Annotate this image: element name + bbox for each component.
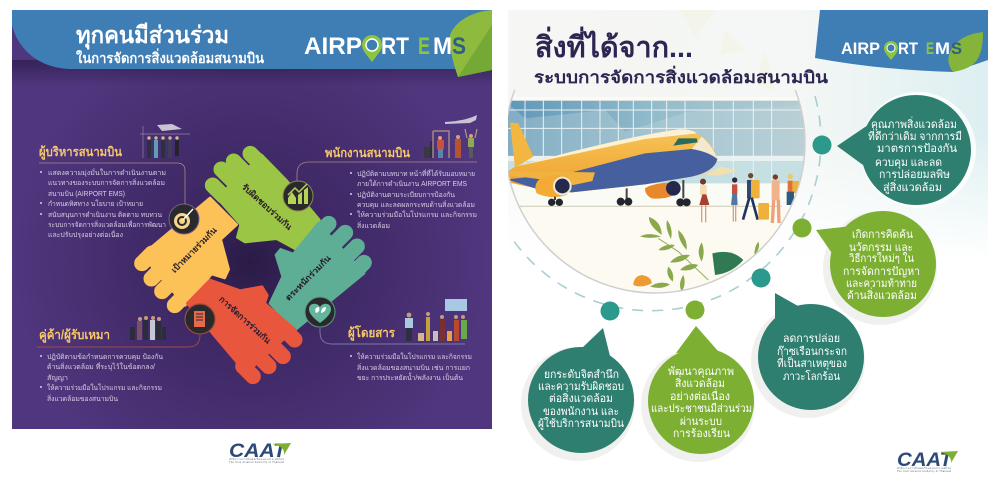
terminal glass xyxy=(505,101,805,292)
header banner xyxy=(815,10,988,72)
travellers xyxy=(699,173,799,223)
logo: airport ems: RT xyxy=(381,33,409,60)
background fade xyxy=(508,130,988,260)
title: ระบบการจัดการสิ่งแวดล้อมสนามบิน xyxy=(534,65,829,87)
body text: ปฏิบัติงานตามระเบียบการป้องกัน xyxy=(357,191,455,199)
title: สิ่งที่ได้จาก... xyxy=(535,26,693,64)
panel: benefits xyxy=(500,0,988,311)
body text xyxy=(40,168,166,239)
icon: passengers and board xyxy=(405,299,467,341)
body text: ปฏิบัติตามข้อกำหนดการควบคุม ป้องกัน xyxy=(47,353,163,361)
body text: สิ่งแวดล้อมของสนามบิน xyxy=(47,394,118,403)
timeline dot 2 xyxy=(792,218,812,238)
body text: สิ่งแวดล้อม xyxy=(357,221,390,230)
logo: airport ems: E xyxy=(418,33,430,60)
hand: goals xyxy=(142,198,237,305)
body text: ปฏิบัติตามบทบาท หน้าที่ที่ได้รับมอบหมาย xyxy=(357,169,475,178)
body text: สนับสนุนการดำเนินงาน ติดตาม ทบทวน xyxy=(48,211,162,219)
bubble: reduce greenhouse gases: ที่เป็นสาเหตุของ xyxy=(777,355,847,370)
banner shadow xyxy=(12,60,492,86)
logo: airport ems: M xyxy=(433,33,452,60)
heading: ผู้บริหารสนามบิน xyxy=(39,145,122,160)
bubble: better environmental quality xyxy=(837,92,976,208)
bubble: awareness: ยกระดับจิตสำนึก xyxy=(544,369,619,381)
bubble: continuous improvement: การร้องเรียน xyxy=(673,427,730,440)
heading: ผู้โดยสาร xyxy=(348,325,395,341)
timeline dot 5 xyxy=(600,302,620,320)
logo: airport ems: S xyxy=(951,39,962,58)
header banner xyxy=(12,10,492,69)
logo: CAAT right: The Civil Aviation Authority of Thailand xyxy=(897,470,952,473)
bubble: continuous improvement: อย่างต่อเนื่อง xyxy=(670,388,730,403)
panel background xyxy=(508,10,988,260)
bubble: continuous improvement xyxy=(641,326,755,462)
logo: CAAT left: สำนักงานการบินพลเรือนแห่งประเทศไทย xyxy=(229,457,284,461)
body text: สนามบิน (AIRPORT EMS) xyxy=(48,190,125,198)
body text: และปรับปรุงอย่างต่อเนื่อง xyxy=(48,230,123,239)
bubble: awareness xyxy=(521,328,635,461)
bubble: awareness: ต่อสิ่งแวดล้อม xyxy=(549,390,613,405)
logo: airport ems xyxy=(841,39,962,60)
logo: airport ems xyxy=(304,33,466,62)
logo: airport ems: AIRP xyxy=(304,33,362,60)
bubble: reduce greenhouse gases: ลดการปล่อย xyxy=(783,333,840,345)
label: responsibility: รับผิดชอบร่วมกัน xyxy=(240,182,294,232)
body text: ควบคุม และลดผลกระทบด้านสิ่งแวดล้อม xyxy=(357,200,475,209)
timeline dot 3 xyxy=(752,268,770,288)
logo: CAAT right: สำนักงานการบินพลเรือนแห่งประเทศไทย xyxy=(897,466,951,470)
bubble: innovation xyxy=(816,211,937,325)
logo: airport ems: RT xyxy=(898,39,919,58)
title xyxy=(534,26,829,87)
foliage xyxy=(633,217,759,292)
bubble: innovation: การจัดการปัญหา xyxy=(843,266,920,278)
icon: target xyxy=(169,204,199,234)
logo: airport ems: M xyxy=(935,39,950,58)
section: suppliers and contractors xyxy=(37,316,200,403)
photo: airplane at terminal xyxy=(508,90,806,294)
pale background shapes xyxy=(680,10,775,90)
section: airport management xyxy=(39,124,190,239)
body text xyxy=(350,352,472,382)
connector xyxy=(37,335,200,347)
bubble: awareness: ผู้ใช้บริการสนามบิน xyxy=(538,417,624,430)
body text: ให้ความร่วมมือในโปรแกรม และกิจกรรม xyxy=(47,383,162,392)
bubble: continuous improvement: และประชาชนมีส่วนร่วม xyxy=(651,402,752,415)
logo: airport ems: E xyxy=(926,39,934,58)
airplane xyxy=(507,122,738,206)
bubble: better environmental quality: คุณภาพสิ่งแวดล้อม xyxy=(871,116,957,131)
section: passengers xyxy=(320,299,472,382)
panel background xyxy=(12,10,492,429)
leaf corner xyxy=(948,32,983,72)
body text: กำหนดทิศทาง นโยบาย เป้าหมาย xyxy=(48,199,143,208)
icon: security staff and plane xyxy=(424,115,477,158)
bubble: innovation: วิธีการใหม่ๆ ใน xyxy=(848,252,914,265)
body text xyxy=(40,353,163,403)
body text: ให้ความร่วมมือในโปรแกรม และกิจกรรม xyxy=(357,210,477,219)
bubble: awareness: ของพนักงาน และ xyxy=(543,406,619,418)
bubble: innovation: เกิดการคิดค้น xyxy=(852,229,913,241)
label: goals: เป้าหมายร่วมกัน xyxy=(169,225,219,275)
bubble: reduce greenhouse gases: ก๊าซเรือนกระจก xyxy=(777,345,847,358)
connector xyxy=(39,163,185,204)
bubble: better environmental quality: ที่ดีกว่าเดิม จากการมี xyxy=(868,128,962,143)
bubble: continuous improvement: สิ่งแวดล้อม xyxy=(675,375,725,390)
title: ทุกคนมีส่วนร่วม xyxy=(76,22,229,50)
leaf corner xyxy=(450,10,492,77)
logo: CAAT left: The Civil Aviation Authority of Thailand xyxy=(229,461,285,464)
timeline dot 4 xyxy=(686,300,704,320)
hand: awareness xyxy=(270,223,364,330)
four hands xyxy=(142,154,364,376)
body text: ด้านสิ่งแวดล้อม ที่ระบุไว้ในข้อตกลง/ xyxy=(47,362,155,371)
bubble: better environmental quality: ควบคุม และลด xyxy=(875,157,942,169)
title: ในการจัดการสิ่งแวดล้อมสนามบิน xyxy=(76,48,264,66)
bubble: innovation: และความท้าทาย xyxy=(846,278,917,290)
panel: everyone participates xyxy=(12,10,492,429)
timeline dot 1 xyxy=(812,136,832,154)
body text: สัญญา xyxy=(47,374,68,382)
label: awareness: ตระหนักร่วมกัน xyxy=(283,253,333,303)
icon: green heart xyxy=(305,297,335,327)
logo: airport ems: AIRP xyxy=(841,39,880,58)
icon: executives and plane xyxy=(140,124,190,158)
bubble: awareness: และความรับผิดชอบ xyxy=(538,381,624,393)
bubble: better environmental quality: สู่สิ่งแวดล้อม xyxy=(883,179,942,194)
connector xyxy=(320,328,465,344)
heading: พนักงานสนามบิน xyxy=(325,146,410,160)
photo rim xyxy=(508,90,806,294)
logo: CAAT right: CAAT xyxy=(897,450,953,471)
body text: ภายใต้การดำเนินงาน AIRPORT EMS xyxy=(357,179,467,188)
connector xyxy=(297,162,477,181)
hand: management xyxy=(187,280,295,376)
bubble: innovation: นวัตกรรม และ xyxy=(849,242,913,254)
body text: สิ่งแวดล้อมของสนามบิน เช่น การแยก xyxy=(357,363,470,372)
body text: แนวทางของระบบการจัดการสิ่งแวดล้อม xyxy=(48,178,165,187)
icon: growth chart xyxy=(283,181,313,211)
heading: คู่ค้า/ผู้รับเหมา xyxy=(39,328,110,343)
body text: แสดงความมุ่งมั่นในการดำเนินงานตาม xyxy=(48,168,166,177)
photo backdrop xyxy=(520,97,798,292)
bubble: better environmental quality: การปล่อยมลพิษ xyxy=(879,169,950,181)
icon: contractors xyxy=(130,316,166,340)
logo: airport ems: S xyxy=(452,33,466,60)
bubble: continuous improvement: พัฒนาคุณภาพ xyxy=(668,366,734,378)
bubble: better environmental quality: มาตรการป้องกัน xyxy=(877,143,957,155)
bubble: innovation: ด้านสิ่งแวดล้อม xyxy=(847,287,917,302)
body text xyxy=(350,169,477,230)
label: management: การจัดการร่วมกัน xyxy=(217,294,273,346)
body text: ขยะ การประหยัดน้ำ/พลังงาน เป็นต้น xyxy=(357,371,463,382)
bubble: reduce greenhouse gases xyxy=(751,293,865,418)
title xyxy=(76,22,264,66)
hand: responsibility xyxy=(207,154,319,249)
icon: document xyxy=(185,304,215,334)
dashed orbit xyxy=(513,96,821,311)
bubble: reduce greenhouse gases: ภาวะโลกร้อน xyxy=(783,369,840,383)
body text: ให้ความร่วมมือในโปรแกรม และกิจกรรม xyxy=(357,352,472,361)
section: airport staff xyxy=(297,115,477,230)
body text: ระบบการจัดการสิ่งแวดล้อมเพื่อการพัฒนา xyxy=(48,220,166,229)
logo: CAAT left: CAAT xyxy=(229,441,288,462)
bubble: continuous improvement: ผ่านระบบ xyxy=(680,416,722,428)
